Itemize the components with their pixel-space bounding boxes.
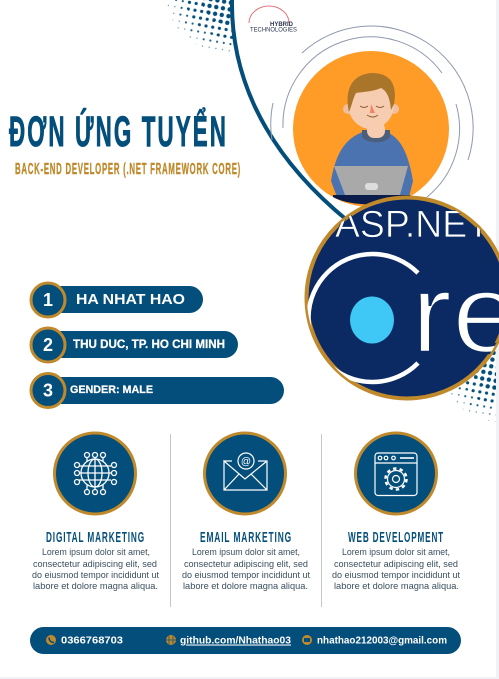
decorative rings around portrait	[271, 26, 473, 197]
icon: globe	[166, 635, 176, 645]
body text: do eiusmod tempor incididunt ut	[182, 570, 310, 581]
heading: EMAIL MARKETING	[200, 530, 292, 546]
badge wordmark: ASP.NET	[335, 204, 490, 246]
body text: consectetur adipiscing elit, sed	[334, 559, 458, 570]
body text: Lorem ipsum dolor sit amet,	[342, 547, 450, 558]
logo: Hybrid Technologies: HYBRID	[270, 22, 294, 28]
icon: envelope	[204, 433, 286, 514]
info row 1: name: 1	[43, 290, 53, 310]
halftone dots: top	[168, 0, 232, 52]
body text	[332, 547, 460, 592]
column dividers	[170, 434, 322, 607]
body text: consectetur adipiscing elit, sed	[184, 559, 308, 570]
info row 2: address	[31, 328, 238, 362]
icon: browser window with gear	[356, 433, 436, 514]
title: ĐƠN ỨNG TUYỂN	[9, 107, 228, 156]
letter C ring	[308, 254, 418, 382]
info row 3: gender: GENDER: MALE	[70, 384, 153, 396]
body text: labore et dolore magna aliqua.	[183, 581, 308, 592]
contact bar	[30, 627, 461, 654]
icon: envelope: @	[241, 456, 251, 468]
halftone dots: bottom right	[451, 350, 496, 422]
panel: digital marketing	[32, 433, 159, 592]
info row 3: gender: 3	[43, 380, 53, 400]
info row 2: address: 2	[43, 335, 53, 355]
infographic canvas: BACK-END DEVELOPER (.NET FRAMEWORK CORE)	[15, 161, 241, 178]
body text	[182, 547, 310, 592]
logo: Hybrid Technologies	[249, 6, 297, 34]
body text: labore et dolore magna aliqua.	[334, 581, 459, 592]
body text: consectetur adipiscing elit, sed	[33, 559, 157, 570]
github link: github.com/Nhathao03	[180, 634, 291, 646]
icon: globe network	[54, 433, 136, 514]
icon: mail	[302, 635, 312, 645]
body text: do eiusmod tempor incididunt ut	[32, 570, 159, 581]
portrait: developer with laptop	[293, 51, 449, 207]
panel: web development	[332, 433, 460, 592]
body text: labore et dolore magna aliqua.	[33, 581, 158, 592]
info row 1: name	[31, 283, 203, 317]
body text: Lorem ipsum dolor sit amet,	[192, 547, 300, 558]
heading: DIGITAL MARKETING	[46, 530, 145, 546]
info row 1: name: HA NHAT HAO	[76, 291, 185, 308]
blue dot	[350, 296, 394, 344]
email address: nhathao212003@gmail.com	[317, 634, 447, 646]
body text: do eiusmod tempor incididunt ut	[332, 570, 460, 581]
body text	[32, 547, 159, 592]
body text: Lorem ipsum dolor sit amet,	[42, 547, 150, 558]
panel: email marketing	[182, 433, 310, 592]
info row 2: address: THU DUC, TP. HO CHI MINH	[73, 337, 225, 351]
icon: phone	[46, 635, 56, 645]
logo: Hybrid Technologies: TECHNOLOGIES	[250, 28, 297, 34]
ASP.NET Core badge	[306, 198, 499, 398]
curved arc divider	[232, 0, 348, 221]
phone number: 0366768703	[61, 634, 123, 646]
info row 3: gender	[31, 374, 284, 408]
